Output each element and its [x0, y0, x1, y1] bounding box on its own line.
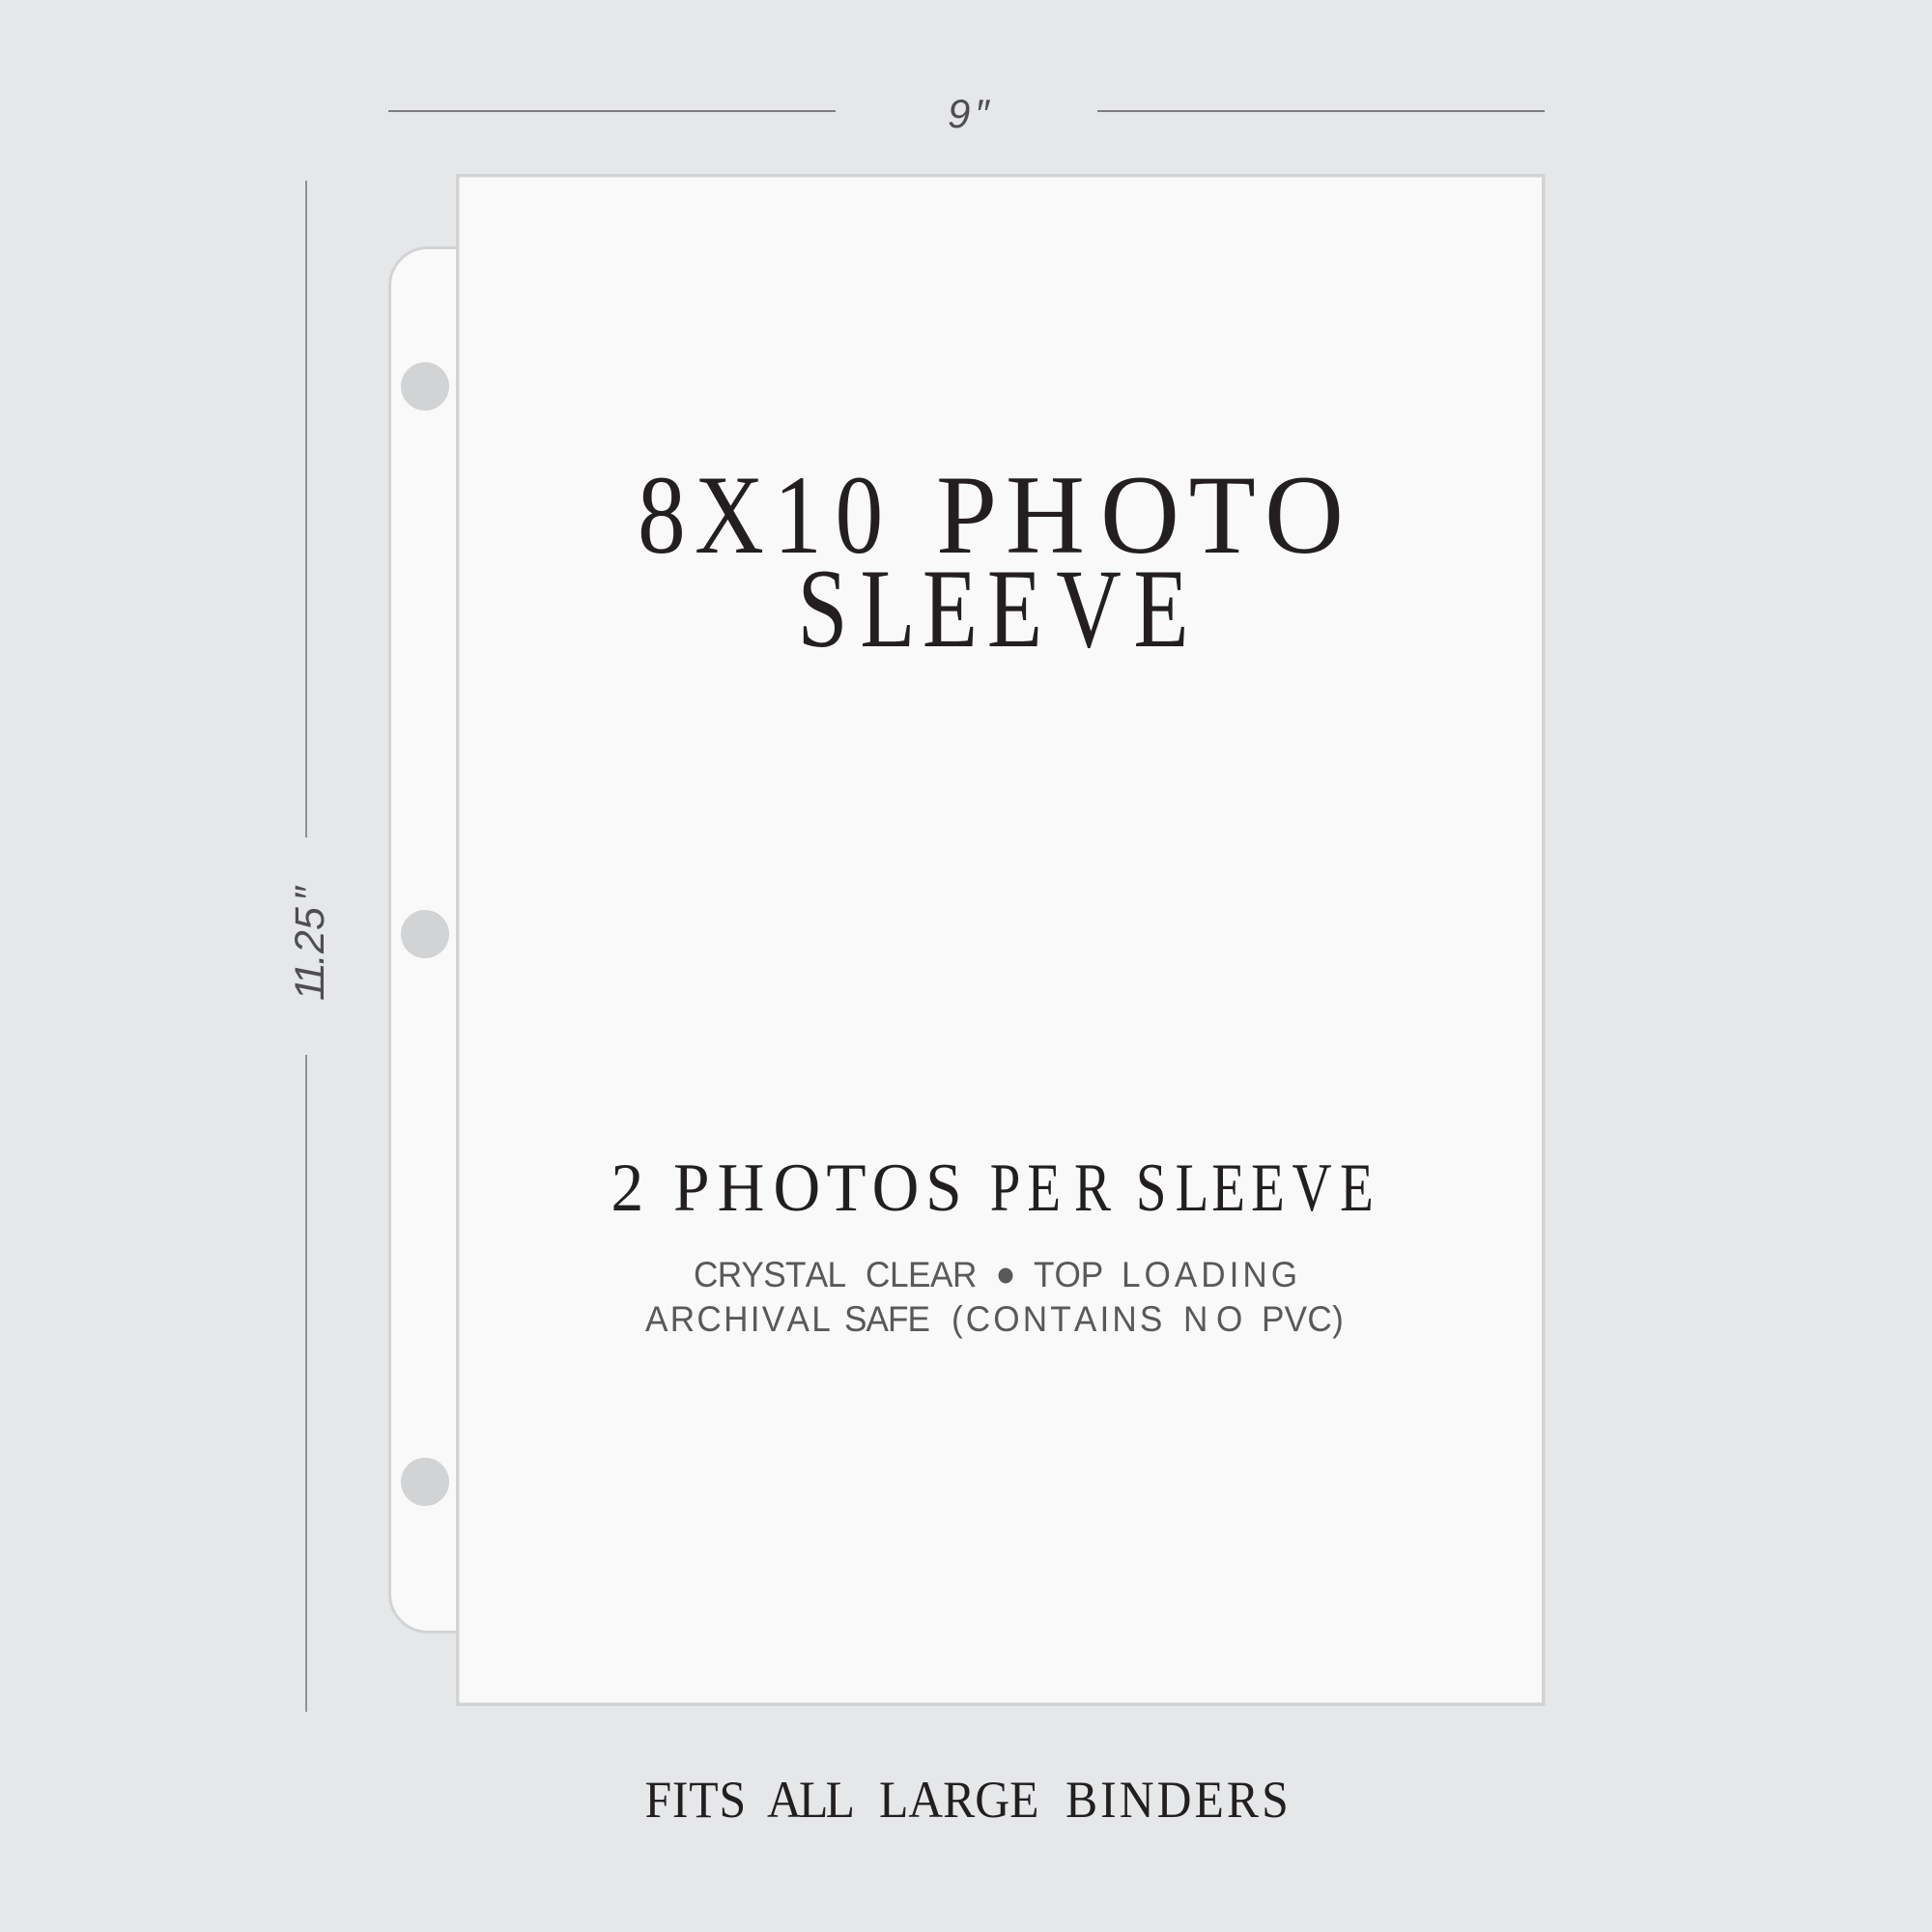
title: 8X10: [638, 453, 883, 578]
title: [638, 451, 1344, 670]
height dimension: 11.25 inches: 11.25″: [287, 885, 333, 1001]
hole: middle: [401, 910, 449, 958]
feature list: CRYSTAL: [694, 1254, 845, 1294]
footer note: ALL: [767, 1772, 852, 1829]
footer note: FITS: [644, 1772, 747, 1829]
hole: bottom: [401, 1458, 449, 1506]
binder tab with punched holes: [390, 247, 458, 1633]
feature list: •: [996, 1244, 1015, 1306]
subtitle: PER SLEEVE: [990, 1150, 1374, 1225]
feature list: TOP: [1034, 1254, 1103, 1294]
title: PHOTO: [936, 451, 1344, 577]
feature list: NO: [1183, 1298, 1251, 1339]
feature list: [645, 1244, 1344, 1339]
feature list: LOADING: [1122, 1254, 1301, 1294]
feature list: SAFE: [844, 1298, 929, 1339]
title: SLEEVE: [798, 546, 1189, 670]
footer note: LARGE: [879, 1772, 1039, 1829]
feature list: (CONTAINS: [952, 1298, 1165, 1339]
feature list: CLEAR: [866, 1254, 977, 1294]
hole: top: [401, 362, 449, 411]
subtitle: 2 PHOTOS: [611, 1149, 962, 1225]
width dimension: 9 inches: 9″: [948, 91, 991, 136]
feature list: PVC): [1262, 1298, 1344, 1339]
footer note: BINDERS: [1065, 1772, 1292, 1829]
sleeve panel: [458, 176, 1544, 1704]
feature list: ARCHIVAL: [645, 1298, 833, 1339]
subtitle: [611, 1149, 1374, 1225]
